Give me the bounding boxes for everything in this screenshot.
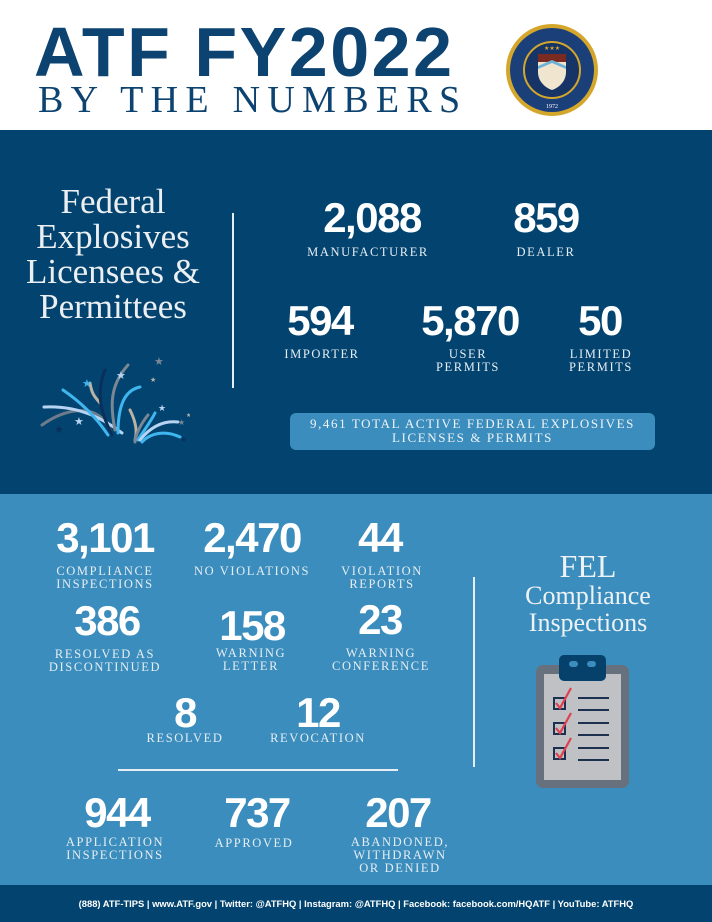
stat: resolved: RESOLVED — [147, 731, 223, 745]
panel: FEL compliance — [0, 494, 712, 885]
icon: fireworks: ★ — [158, 403, 166, 413]
callout: total: 9,461 TOTAL ACTIVE FEDERAL EXPLOSIVES — [310, 416, 635, 431]
stat: resolved — [146, 689, 223, 745]
heading: Federal Explosives Licensees & Permittees — [26, 182, 200, 326]
heading: Federal Explosives Licensees & Permittees: Explosives — [36, 217, 190, 256]
heading: FEL Compliance Inspections: Inspections — [529, 608, 647, 637]
stat: compliance inspections: COMPLIANCE — [56, 564, 154, 578]
icon: ATF seal: ★★★ — [544, 45, 560, 52]
stat: dealer: 859 — [513, 194, 579, 241]
heading: Federal Explosives Licensees & Permittees: Licensees & — [26, 252, 200, 291]
icon: fireworks: ★ — [74, 416, 84, 428]
stat: warning conference: CONFERENCE — [332, 659, 430, 673]
stat: warning conference: 23 — [358, 596, 402, 643]
stat: abandoned: WITHDRAWN — [353, 848, 447, 862]
stat: importer — [284, 297, 360, 361]
stat: user permits: 5,870 — [421, 297, 519, 344]
icon: fireworks: ★ — [178, 418, 185, 427]
heading: FEL Compliance Inspections: Compliance — [525, 581, 651, 610]
stat: violation reports: VIOLATION — [341, 564, 423, 578]
stat: warning letter: WARNING — [216, 646, 286, 660]
stat: abandoned: OR DENIED — [359, 861, 441, 875]
icon: ATF seal: 1972 — [546, 104, 558, 110]
stat: violation reports — [341, 514, 423, 591]
heading: FEL Compliance Inspections: FEL — [560, 548, 616, 584]
stat: violation reports: REPORTS — [349, 577, 415, 591]
stat: limited permits: LIMITED — [570, 347, 632, 361]
callout: total: LICENSES & PERMITS — [392, 430, 553, 444]
stat: resolved as discontinued: RESOLVED AS — [55, 647, 155, 661]
stat: violation reports: 44 — [358, 514, 402, 561]
icon: fireworks: ★ — [180, 435, 187, 444]
stat: resolved: 8 — [174, 689, 196, 736]
icon: fireworks: ★ — [150, 376, 156, 384]
stat: manufacturer — [307, 194, 429, 259]
panel: federal explosives — [0, 130, 712, 494]
stat: no violations: NO VIOLATIONS — [194, 564, 310, 578]
callout: total — [290, 413, 655, 450]
stat: resolved as discontinued: 386 — [74, 597, 140, 644]
stat: warning conference — [332, 596, 430, 673]
stat: limited permits: 50 — [578, 297, 622, 344]
stat: revocation: 12 — [296, 689, 340, 736]
divider horizontal — [118, 769, 398, 771]
stat: no violations: 2,470 — [203, 514, 301, 561]
stat: limited permits — [569, 297, 633, 374]
heading: FEL Compliance Inspections — [525, 548, 651, 637]
stat: approved — [214, 789, 293, 850]
stat: compliance inspections: INSPECTIONS — [56, 577, 154, 591]
stat: approved: 737 — [224, 789, 290, 836]
stat: dealer: DEALER — [517, 245, 575, 259]
icon: clipboard — [536, 655, 629, 788]
footer — [0, 885, 712, 922]
divider line — [232, 213, 234, 388]
stat: compliance inspections: 3,101 — [56, 514, 154, 561]
icon: fireworks — [40, 356, 190, 444]
stat: warning letter: LETTER — [223, 659, 279, 673]
icon: fireworks: ★ — [154, 356, 164, 368]
stat: warning letter — [216, 602, 286, 673]
header — [0, 0, 712, 130]
stat: warning letter: 158 — [219, 602, 285, 649]
stat: application inspections: 944 — [84, 789, 150, 836]
stat: revocation: REVOCATION — [270, 731, 366, 745]
stat: abandoned: 207 — [365, 789, 431, 836]
stat: importer: 594 — [287, 297, 353, 344]
stat: user permits: PERMITS — [436, 360, 500, 374]
icon: fireworks: ★ — [82, 378, 92, 390]
stat: application inspections: APPLICATION — [66, 835, 164, 849]
footer: (888) ATF-TIPS | www.ATF.gov | Twitter: @ATFHQ | Instagram: @ATFHQ | Facebook: facebook.com/HQATF | YouTube: ATFHQ — [79, 898, 633, 909]
stat: application inspections — [66, 789, 164, 862]
icon: ATF seal — [506, 24, 598, 116]
stat: compliance inspections — [56, 514, 154, 591]
stat: user permits — [421, 297, 519, 374]
stat: resolved as discontinued: DISCONTINUED — [49, 660, 161, 674]
stat: manufacturer: MANUFACTURER — [307, 245, 429, 259]
heading: Federal Explosives Licensees & Permittees: Permittees — [39, 287, 187, 326]
stat: user permits: USER — [449, 347, 487, 361]
stat: abandoned — [351, 789, 449, 875]
heading: Federal Explosives Licensees & Permittees: Federal — [61, 182, 165, 221]
subtitle: BY THE NUMBERS — [38, 79, 467, 121]
stat: revocation — [270, 689, 366, 745]
stat: abandoned: ABANDONED, — [351, 835, 449, 849]
stat: application inspections: INSPECTIONS — [66, 848, 164, 862]
stat: importer: IMPORTER — [284, 347, 360, 361]
title: ATF FY2022 — [34, 13, 454, 91]
stat: warning conference: WARNING — [346, 646, 416, 660]
divider vertical — [473, 577, 475, 767]
stat: limited permits: PERMITS — [569, 360, 633, 374]
stat: approved: APPROVED — [215, 836, 293, 850]
stat: resolved as discontinued — [49, 597, 161, 674]
icon: fireworks: ★ — [116, 370, 126, 382]
stat: manufacturer: 2,088 — [323, 194, 421, 241]
stat: no violations — [194, 514, 310, 578]
icon: fireworks: ★ — [54, 424, 64, 436]
